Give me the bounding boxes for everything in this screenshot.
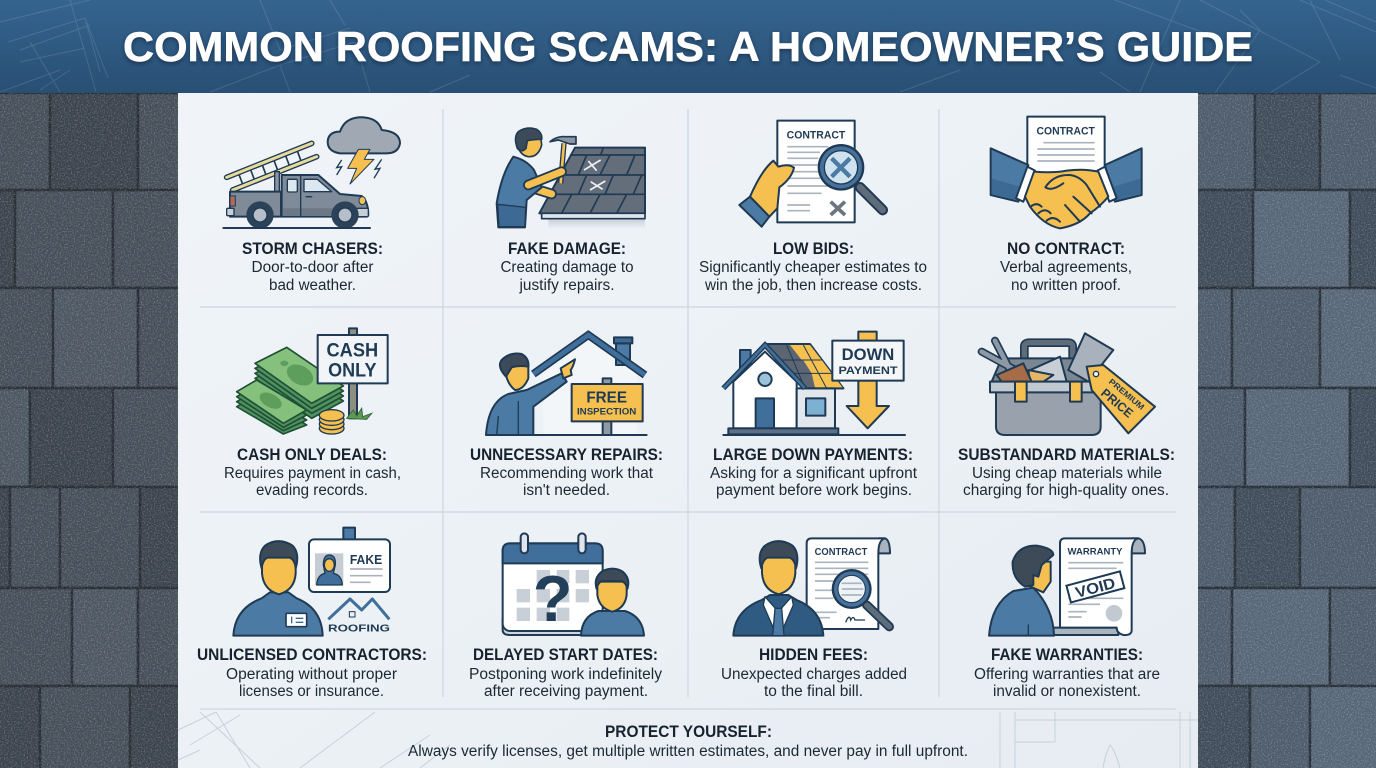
description	[974, 666, 1160, 700]
card: substandard materials	[958, 333, 1175, 499]
heading: CASH ONLY DEALS:	[237, 445, 387, 464]
description	[1000, 259, 1132, 294]
description: Using cheap materials while	[972, 465, 1162, 482]
description	[226, 666, 397, 700]
icon: cash stacks and cash only sign	[237, 328, 388, 434]
icon: businessman with contract and magnifying glass	[733, 538, 890, 636]
card: hidden fees	[721, 538, 907, 700]
description: no written proof.	[1011, 277, 1121, 294]
description: invalid or nonexistent.	[993, 683, 1141, 700]
description: bad weather.	[269, 277, 356, 294]
description: Unexpected charges added	[721, 666, 907, 683]
heading: UNLICENSED CONTRACTORS:	[197, 645, 427, 664]
icon: house with down payment sign and arrow: PAYMENT	[838, 365, 898, 377]
icon: house with down payment sign and arrow: DOWN	[842, 345, 894, 364]
description: justify repairs.	[519, 277, 614, 294]
grid dividers	[200, 109, 1176, 709]
description: Significantly cheaper estimates to	[699, 259, 927, 276]
description: to the final bill.	[764, 683, 863, 700]
card: fake warranties	[974, 538, 1160, 700]
title: COMMON ROOFING SCAMS: A HOMEOWNER’S GUIDE	[123, 23, 1253, 70]
description: Door-to-door after	[252, 259, 374, 276]
description: Recommending work that	[480, 465, 654, 482]
icon: cash stacks and cash only sign: ONLY	[328, 360, 377, 381]
icon: toolbox with premium price tag: PRICE	[1098, 386, 1136, 421]
icon: handshake in front of contract	[991, 117, 1142, 228]
heading: NO CONTRACT:	[1007, 239, 1125, 258]
description: evading records.	[256, 482, 368, 499]
heading: LARGE DOWN PAYMENTS:	[713, 445, 913, 464]
icon: calendar with question mark and waiting man	[503, 533, 644, 636]
heading: DELAYED START DATES:	[473, 645, 658, 664]
icon: contractor with fake id badge and roofing logo: ROOFING	[328, 624, 390, 635]
icon: pickup truck with ladder and storm cloud	[223, 117, 400, 229]
icon: contract under magnifying glass: CONTRACT	[787, 129, 846, 141]
heading: STORM CHASERS:	[242, 239, 383, 258]
footer text: Always verify licenses, get multiple written estimates, and never pay in full upfront.	[408, 743, 968, 760]
card: large down payments	[710, 332, 918, 499]
description	[252, 259, 374, 294]
icon: man reading void warranty	[989, 538, 1145, 636]
icon: cash stacks and cash only sign: CASH	[326, 341, 378, 362]
heading: FAKE DAMAGE:	[508, 239, 626, 258]
card: fake damage	[497, 128, 645, 294]
description: after receiving payment.	[484, 683, 648, 700]
description: Postponing work indefinitely	[469, 666, 662, 683]
header banner	[0, 0, 1376, 93]
icon: man hammering roof shingles	[497, 128, 645, 228]
heading: HIDDEN FEES:	[759, 645, 868, 664]
description	[710, 465, 918, 499]
description	[721, 666, 907, 700]
description	[480, 465, 654, 499]
description	[699, 259, 927, 294]
description: Offering warranties that are	[974, 666, 1160, 683]
description: payment before work begins.	[716, 482, 912, 499]
card: unlicensed contractors	[197, 528, 427, 700]
description: Verbal agreements,	[1000, 259, 1132, 276]
footer heading: PROTECT YOURSELF:	[605, 722, 772, 741]
description: Asking for a significant upfront	[710, 465, 918, 482]
description	[963, 465, 1169, 499]
heading: FAKE WARRANTIES:	[991, 645, 1143, 664]
heading: SUBSTANDARD MATERIALS:	[958, 445, 1175, 464]
icon: contractor with fake id badge and roofing logo	[233, 528, 390, 636]
description	[224, 465, 401, 499]
icon: man reading void warranty: VOID	[1074, 575, 1117, 602]
icon: businessman with contract and magnifying glass: CONTRACT	[815, 547, 867, 558]
icon: calendar with question mark and waiting man: ?	[533, 562, 573, 635]
description: charging for high-quality ones.	[963, 482, 1169, 499]
icon: man pointing at house roof with free inspection sign	[486, 335, 647, 435]
card: no contract	[991, 117, 1142, 294]
icon: contractor with fake id badge and roofing logo: FAKE	[350, 553, 382, 567]
icon: toolbox with premium price tag	[982, 333, 1155, 435]
icon: handshake in front of contract: CONTRACT	[1036, 125, 1095, 137]
icon: house with down payment sign and arrow	[723, 332, 905, 435]
description: Creating damage to	[500, 259, 634, 276]
card: unnecessary repairs	[470, 335, 663, 499]
description: licenses or insurance.	[239, 683, 384, 700]
icon: man pointing at house roof with free inspection sign: FREE	[586, 390, 627, 407]
description: Requires payment in cash,	[224, 465, 401, 482]
description	[469, 666, 662, 700]
card: storm chasers	[223, 117, 400, 294]
description: win the job, then increase costs.	[704, 277, 922, 294]
icon: man pointing at house roof with free inspection sign: INSPECTION	[577, 406, 636, 416]
icon: man reading void warranty: WARRANTY	[1067, 546, 1123, 556]
card: low bids	[699, 121, 927, 294]
content panel	[178, 93, 1198, 768]
card: cash only deals	[224, 328, 401, 499]
card: delayed start dates	[469, 533, 662, 700]
description: isn't needed.	[523, 482, 610, 499]
footer: protect yourself	[408, 722, 968, 760]
icon: contract under magnifying glass	[739, 121, 883, 227]
heading: LOW BIDS:	[773, 239, 854, 258]
heading: UNNECESSARY REPAIRS:	[470, 445, 663, 464]
description	[500, 259, 634, 294]
icon: toolbox with premium price tag: PREMIUM	[1107, 376, 1147, 412]
description: Operating without proper	[226, 666, 397, 683]
